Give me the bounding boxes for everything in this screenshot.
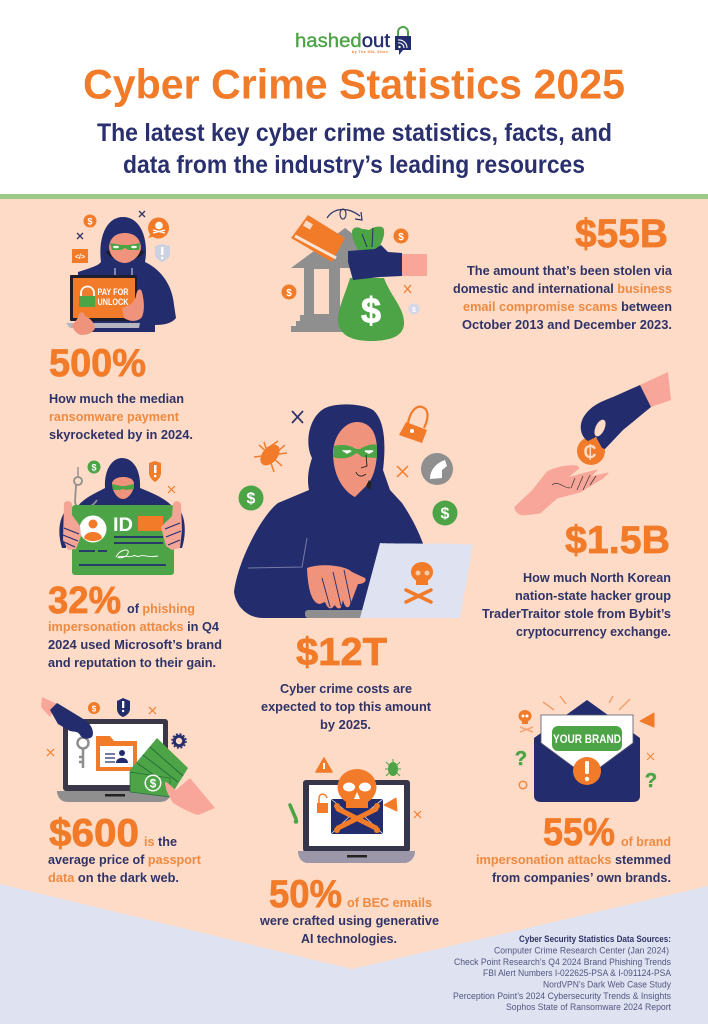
stat: 500%: 500% — [49, 342, 146, 385]
text: Bybit description: nation-state hacker group — [515, 588, 671, 603]
text: brand description — [476, 834, 671, 885]
panel: business email compromise stat — [282, 209, 673, 341]
icon: hands passing a bitcoin — [515, 372, 671, 515]
icon: hacker with ransomware laptop: PAY FOR — [98, 287, 129, 297]
text: BEC AI description — [259, 895, 439, 946]
panel: ransomware stat — [49, 211, 193, 442]
icon: hacker with ransomware laptop: UNLOCK — [98, 297, 129, 307]
green header rule — [0, 194, 708, 199]
text: BEC theft description: domestic and international business — [453, 281, 672, 296]
text: BEC theft description: October 2013 and December 2023. — [462, 317, 672, 332]
subtitle: The latest key cyber crime statistics, facts, and — [97, 119, 612, 147]
text: phishing description: and reputation to their gain. — [48, 655, 216, 670]
icon: hacker with ransomware laptop: </> — [75, 254, 85, 261]
text: cost description: expected to top this amount — [261, 699, 432, 714]
text: phishing description — [48, 601, 222, 670]
panel: central $12T stat — [234, 404, 473, 732]
data sources: Cyber Security Statistics Data Sources: — [519, 934, 671, 945]
icon: hacker with fake ID card: ID — [113, 515, 133, 536]
panel: phishing stat — [48, 458, 222, 670]
panel: generative AI BEC stat — [259, 758, 439, 946]
data sources: Perception Point’s 2024 Cybersecurity Trends & Insights — [453, 991, 671, 1002]
text: brand description: from companies’ own brands. — [492, 870, 671, 885]
icon: bank, card and money bag — [282, 209, 427, 341]
text: BEC theft description: email compromise scams between — [463, 299, 672, 314]
text: ransomware description — [49, 391, 193, 442]
text: ransomware description: ransomware payment — [49, 409, 180, 424]
text: BEC theft description — [453, 263, 673, 332]
data sources: FBI Alert Numbers I-022625-PSA & I-091124-PSA — [483, 968, 672, 979]
text: cost description — [261, 681, 432, 732]
icon: envelope with your brand letter: ? — [645, 770, 657, 792]
text: passport description: average price of passport — [48, 852, 202, 867]
data sources: Computer Crime Research Center (Jan 2024) — [494, 946, 669, 956]
data sources: NordVPN’s Dark Web Case Study — [543, 980, 671, 990]
icon: laptop, key and cash: $ — [150, 776, 157, 790]
stat: 32%: 32% — [48, 580, 121, 622]
text: passport description: data on the dark web. — [48, 870, 179, 885]
text: Bybit description: How much North Korean — [523, 570, 671, 585]
text: ransomware description: skyrocketed by in 2024. — [49, 427, 193, 442]
icon: hacker with fake ID card — [59, 458, 185, 575]
icon: hands passing a bitcoin: ₵ — [584, 442, 596, 462]
icon: envelope with your brand letter: YOUR BRAND — [553, 734, 621, 746]
subtitle: data from the industry’s leading resources — [123, 151, 585, 179]
text: phishing description: impersonation attacks in Q4 — [48, 619, 220, 634]
text: ransomware description: How much the median — [49, 391, 184, 406]
text: brand description: impersonation attacks stemmed — [476, 852, 671, 867]
panel: crypto theft stat — [482, 372, 671, 639]
icon: hacker at laptop: $ — [247, 490, 256, 508]
text: passport description: is the — [144, 834, 177, 849]
text: cost description: Cyber crime costs are — [280, 681, 412, 696]
text: Bybit description: cryptocurrency exchange. — [516, 624, 671, 639]
data sources: Sophos State of Ransomware 2024 Report — [506, 1002, 671, 1013]
text: phishing description: 2024 used Microsoft’s brand — [48, 637, 222, 652]
icon: hacker at laptop: $ — [441, 506, 450, 522]
icon: bank, card and money bag: $ — [286, 288, 292, 299]
icon: envelope with your brand letter: ? — [515, 748, 527, 770]
stat: $1.5B: $1.5B — [565, 519, 670, 562]
text: passport description — [48, 834, 202, 885]
icon: laptop, key and cash: $ — [92, 704, 97, 714]
icon: bank, card and money bag: $ — [412, 307, 416, 314]
text: cost description: by 2025. — [320, 717, 371, 732]
data sources — [453, 934, 672, 1013]
stat: 50%: 50% — [269, 873, 342, 916]
icon: hacker with fake ID card: $ — [91, 462, 97, 472]
icon: bank, card and money bag: $ — [361, 290, 381, 331]
icon: bank, card and money bag: $ — [398, 232, 404, 243]
stat: $600: $600 — [49, 812, 139, 855]
icon: laptop, key and cash — [41, 697, 215, 815]
icon: laptop with skull envelope — [290, 758, 421, 863]
stat: 55%: 55% — [543, 811, 615, 854]
text: BEC theft description: The amount that’s been stolen via — [467, 263, 673, 278]
text: Bybit description — [482, 570, 671, 639]
stat: $55B: $55B — [575, 212, 668, 256]
icon: hacker at laptop — [234, 404, 473, 618]
text: phishing description: of phishing — [127, 601, 195, 616]
lavender footer panel — [0, 884, 708, 1024]
text: BEC AI description: were crafted using generative — [259, 913, 439, 928]
text: BEC AI description: AI technologies. — [301, 931, 397, 946]
data sources: Check Point Research’s Q4 2024 Brand Phishing Trends — [454, 957, 671, 968]
icon: hacker with ransomware laptop: $ — [87, 216, 93, 226]
icon: hacker with ransomware laptop — [66, 211, 176, 335]
text: Bybit description: TraderTraitor stole from Bybit’s — [482, 606, 671, 621]
logo: hashedout: hashedout — [295, 31, 391, 52]
logo: hashedout — [295, 27, 411, 55]
logo: hashedout: by The SSL Store — [352, 50, 388, 54]
panel: brand impersonation stat — [476, 696, 671, 885]
subtitle — [97, 119, 612, 179]
text: brand description: of brand — [621, 834, 671, 849]
text: BEC AI description: of BEC emails — [347, 895, 432, 910]
stat: $12T: $12T — [296, 631, 387, 674]
panel: passport data stat — [41, 697, 215, 885]
title: Cyber Crime Statistics 2025 — [83, 60, 625, 108]
icon: envelope with your brand letter — [515, 696, 657, 802]
